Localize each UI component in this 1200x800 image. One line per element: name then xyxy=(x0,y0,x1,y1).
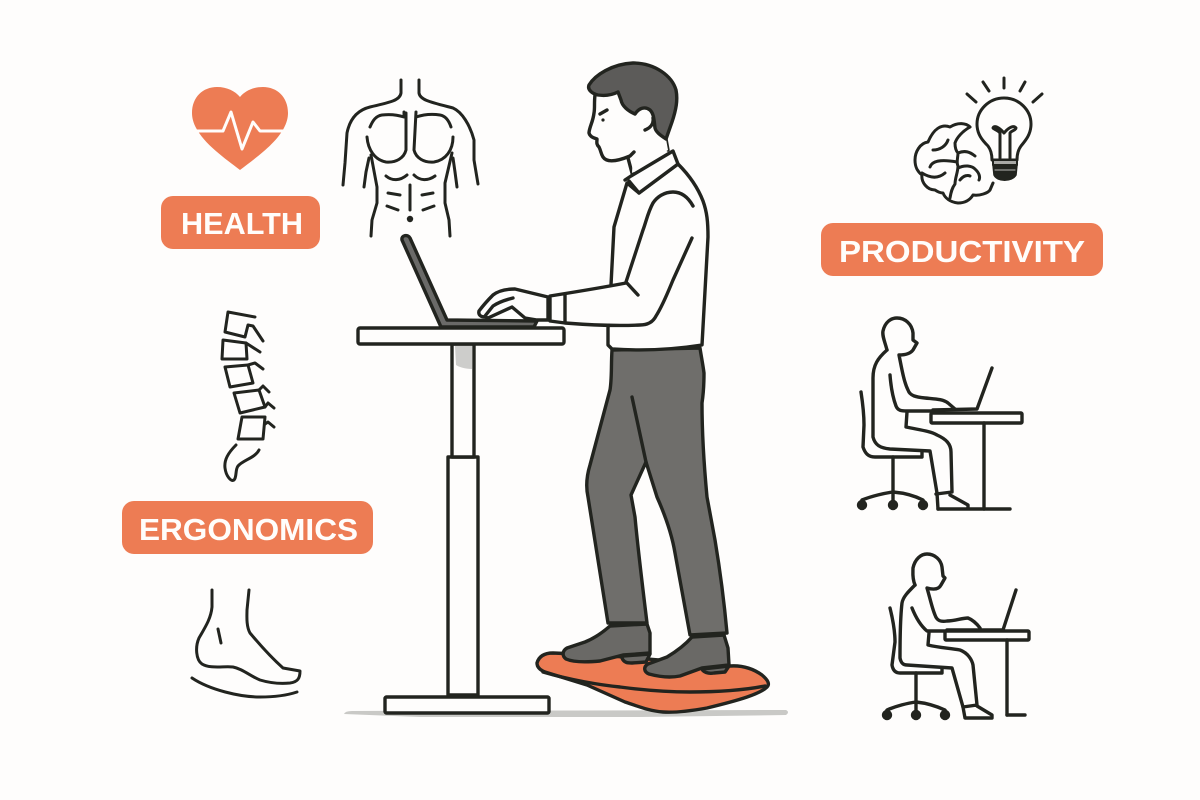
trousers xyxy=(587,348,727,635)
label: ergonomics xyxy=(122,501,373,554)
sleeve xyxy=(550,192,693,325)
eye and brow xyxy=(600,110,607,114)
laptop xyxy=(947,590,1016,630)
bulb base xyxy=(993,160,1017,165)
desk base xyxy=(385,697,549,713)
trouser leg crease xyxy=(632,397,646,462)
icon: torso xyxy=(343,80,478,236)
desk xyxy=(945,631,1029,640)
icon: heart with pulse xyxy=(192,87,288,170)
laptop xyxy=(933,368,992,410)
chair xyxy=(890,608,942,673)
desk top xyxy=(358,328,564,344)
bulb glass xyxy=(977,98,1031,160)
label: productivity: PRODUCTIVITY xyxy=(839,234,1085,269)
label: health: HEALTH xyxy=(181,206,303,241)
shirt torso xyxy=(608,164,708,350)
rear shoe xyxy=(563,624,650,662)
body outline xyxy=(913,554,980,628)
hair xyxy=(589,63,677,139)
filament xyxy=(993,127,1016,158)
label: productivity xyxy=(821,223,1103,276)
front shoe xyxy=(645,635,729,677)
body outline xyxy=(883,318,955,409)
icon: spine xyxy=(222,312,274,480)
laptop xyxy=(402,236,537,327)
hand xyxy=(479,289,548,320)
icon: seated person, upright xyxy=(858,318,1022,509)
rear shoe heel xyxy=(622,654,650,663)
icon: brain and light bulb xyxy=(915,78,1042,203)
ear xyxy=(645,118,653,130)
brain folds xyxy=(955,127,975,156)
standing desk xyxy=(358,328,564,713)
desk upper column xyxy=(452,344,474,457)
balance board xyxy=(537,653,768,712)
ground shadow xyxy=(344,710,788,717)
collar xyxy=(625,151,678,193)
label: ergonomics: ERGONOMICS xyxy=(139,512,358,547)
man standing xyxy=(479,63,729,677)
brain outline xyxy=(915,124,993,203)
icon: seated person, leaning xyxy=(884,554,1029,718)
label: health xyxy=(161,196,320,249)
front shoe heel xyxy=(702,666,729,673)
desk xyxy=(931,413,1022,423)
icon: foot xyxy=(192,590,300,697)
chair xyxy=(861,392,922,457)
face xyxy=(589,92,668,173)
neck xyxy=(628,139,668,173)
rays xyxy=(967,78,1042,102)
desk lower column xyxy=(448,457,478,695)
